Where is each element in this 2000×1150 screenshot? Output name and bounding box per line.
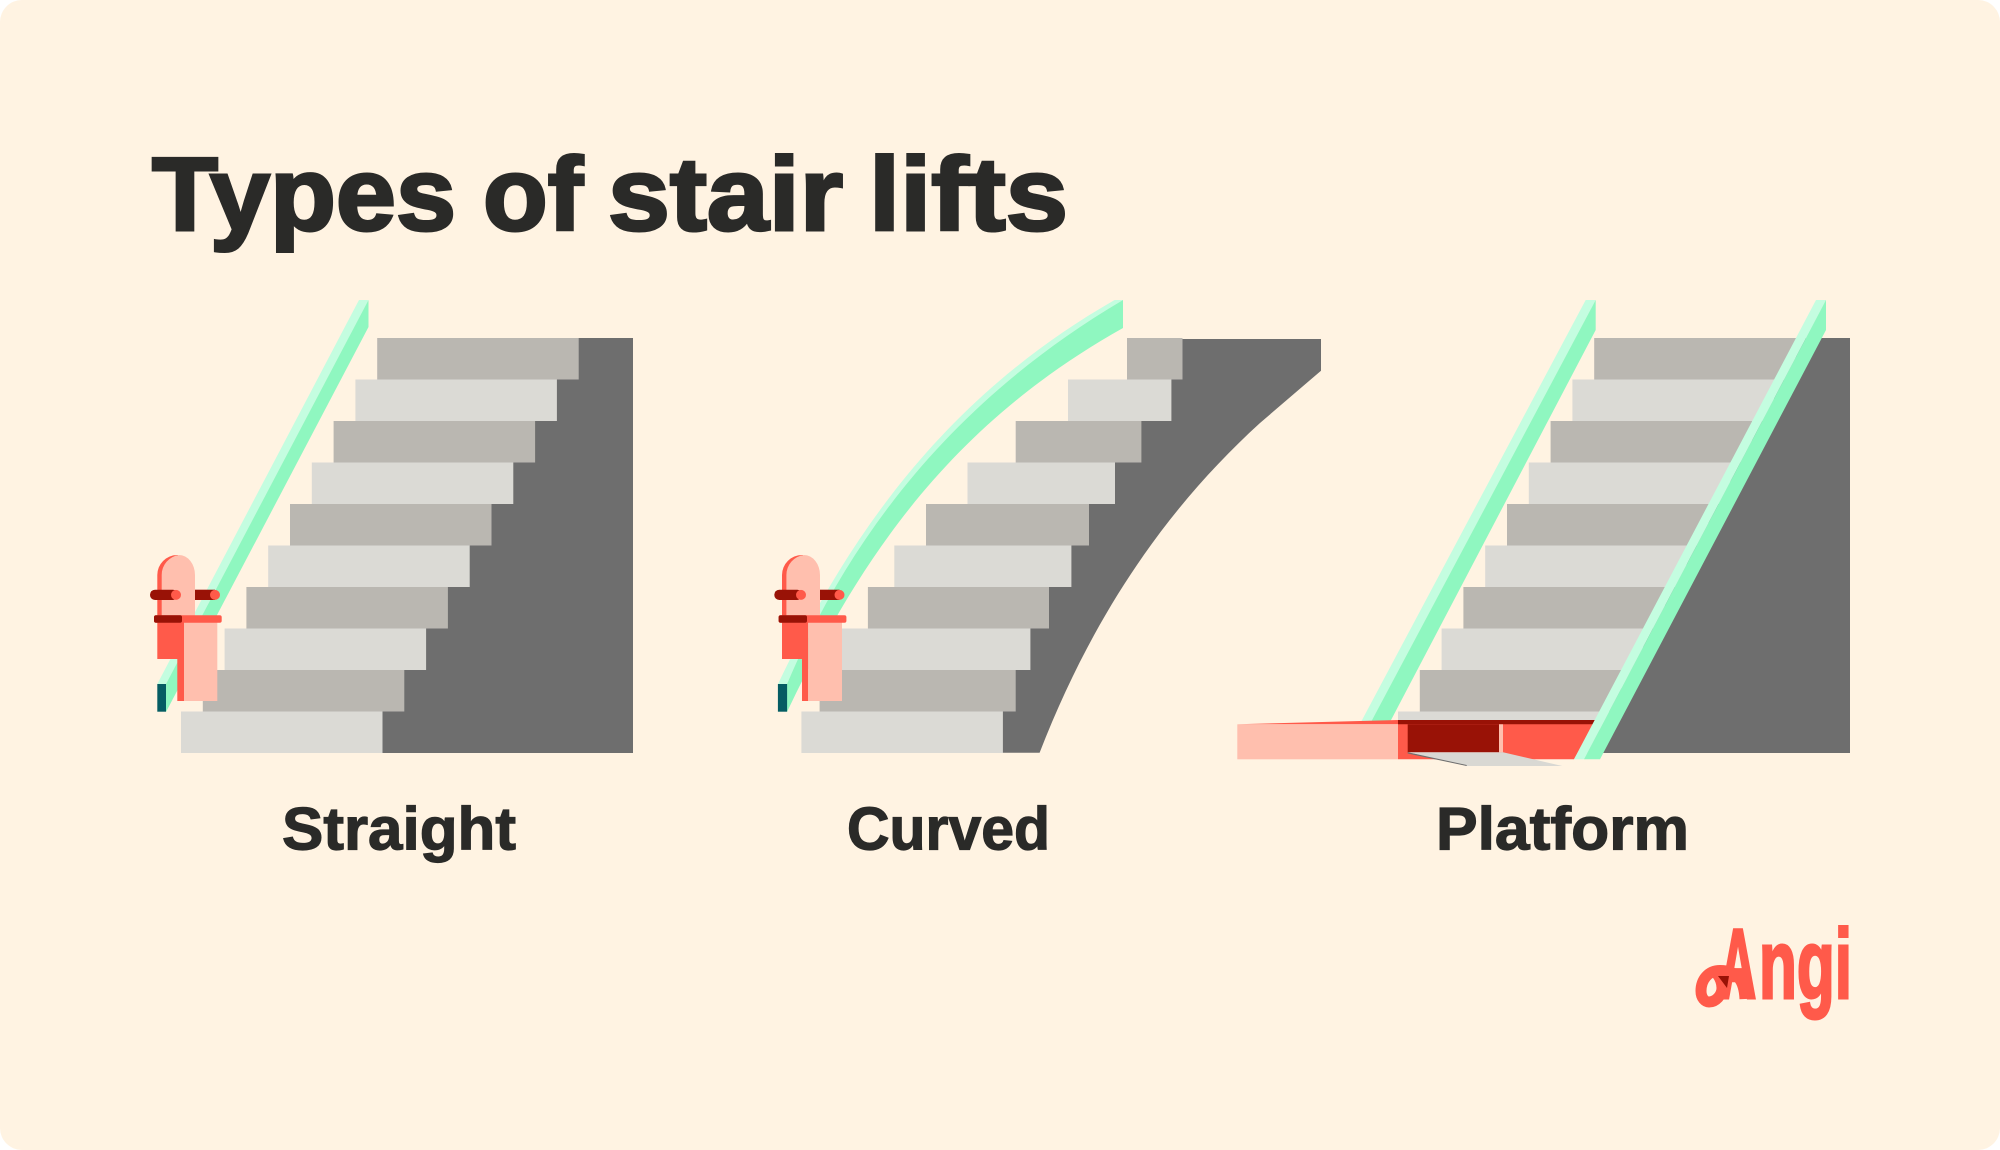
illustration: curved stair lift — [774, 300, 1321, 753]
lift chair: curved — [774, 555, 846, 701]
logo: Angi — [1701, 909, 1852, 1019]
steps: straight — [181, 338, 579, 753]
illustration: straight stair lift — [150, 300, 633, 753]
label: Platform: Platform — [1436, 796, 1689, 862]
lift chair: straight — [150, 555, 222, 701]
illustration: platform stair lift — [1237, 300, 1850, 766]
right rail: platform — [1574, 300, 1826, 759]
logo: Angi: A — [1720, 909, 1756, 1019]
label: Straight: Straight — [282, 796, 516, 862]
label: Curved: Curved — [847, 796, 1050, 862]
rail: straight — [157, 300, 368, 712]
stair base: straight — [345, 338, 633, 753]
platform lift — [1237, 720, 1596, 766]
stair base: curved — [983, 339, 1321, 753]
title — [152, 137, 1068, 253]
logo: Angi: ngi — [1759, 909, 1852, 1019]
left rail: platform — [1361, 300, 1596, 722]
steps: curved — [801, 338, 1182, 753]
title: lifts — [869, 137, 1068, 253]
rail: curved — [778, 300, 1123, 712]
steps: platform — [1398, 338, 1796, 753]
title: stair — [608, 137, 843, 253]
title: Types — [152, 137, 456, 253]
stair base: platform — [1590, 338, 1850, 753]
title: of — [483, 137, 583, 253]
